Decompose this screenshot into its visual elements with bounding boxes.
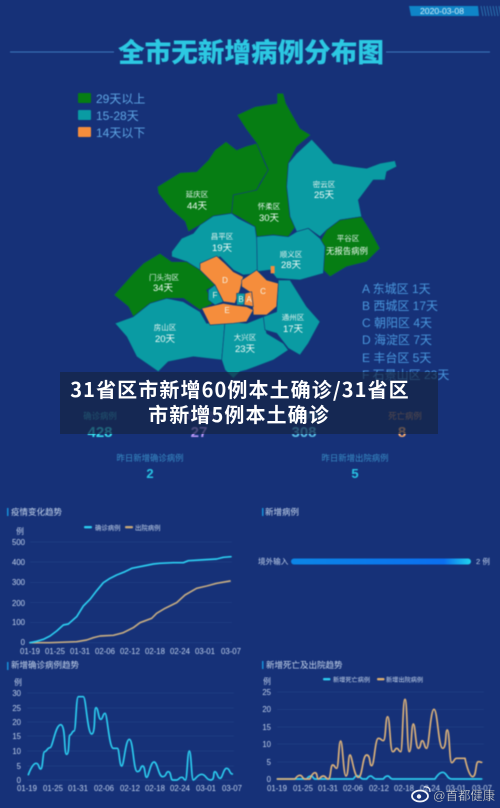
yesterday's new cases: 5 <box>351 466 359 481</box>
chart: new confirmed cases: 15 <box>12 732 22 741</box>
district: Pinggu <box>320 217 380 277</box>
panel: new cases bar: 新增病例 <box>265 507 299 517</box>
map legend: 14天以下 <box>96 126 145 140</box>
chart: new confirmed cases: 20 <box>12 718 22 727</box>
watermark <box>412 787 495 803</box>
chart: new confirmed cases: 02-12 <box>120 784 140 793</box>
district list: B 西城区 17天 <box>362 299 438 313</box>
chart: new confirmed cases: 例 <box>14 677 22 687</box>
chart: new deaths and discharges: 02-06 <box>343 784 363 793</box>
statistics row <box>83 411 422 441</box>
chart: cumulative trend: 02-18 <box>145 647 165 656</box>
chart: new confirmed cases: 新增确诊病例趋势 <box>11 660 80 670</box>
map labels: 20天 <box>155 334 176 345</box>
statistics row: 27 <box>191 424 207 441</box>
map labels: 23天 <box>235 344 256 355</box>
chart: new deaths and discharges: 02-12 <box>369 784 389 793</box>
headline overlay: 31省区市新增60例本土确诊/31省区 <box>70 374 410 403</box>
chart: cumulative trend: 500 <box>12 538 26 547</box>
chart: new deaths and discharges: 新增死亡及出院趋势 <box>266 660 343 670</box>
chart: cumulative trend: 02-06 <box>95 647 115 656</box>
line: daily deaths <box>277 772 482 779</box>
chart: cumulative trend: 100 <box>12 618 26 627</box>
district: Yanqing <box>157 142 268 232</box>
line: discharged cumulative <box>30 581 230 643</box>
map labels: 门头沟区 <box>149 272 179 282</box>
chart: cumulative trend: 03-07 <box>221 647 241 656</box>
chart: cumulative trend: 例 <box>16 526 24 536</box>
map labels: 怀柔区 <box>258 201 281 211</box>
chart: new confirmed cases: 5 <box>17 762 22 771</box>
district: Shijingshan <box>208 285 223 305</box>
chart: new confirmed cases: 01-19 <box>17 784 37 793</box>
district: Fangshan <box>115 298 225 372</box>
chart: new confirmed cases: 01-25 <box>43 784 64 793</box>
line: daily confirmed <box>28 697 232 780</box>
district: Haidian <box>200 256 243 303</box>
chart: new confirmed cases: 25 <box>12 704 22 713</box>
map labels: 延庆区 <box>186 189 209 199</box>
chart: new deaths and discharges: 5 <box>267 758 272 767</box>
chart legend: 新增出院病例 <box>386 676 423 684</box>
map labels <box>149 179 368 355</box>
district list: D 海淀区 7天 <box>362 332 432 347</box>
panel: new cases bar <box>258 507 490 566</box>
line: daily discharged <box>277 699 482 779</box>
district list: A 东城区 1天 <box>362 282 431 296</box>
icon: weibo <box>412 787 430 802</box>
map labels: 19天 <box>212 243 233 254</box>
map legend: 29天以上 <box>96 92 145 106</box>
watermark: @首都健康 <box>433 788 495 803</box>
chart: cumulative trend: 02-24 <box>170 647 191 656</box>
statistics row: 8 <box>398 424 406 441</box>
district: Tongzhou <box>263 280 320 355</box>
chart: new deaths and discharges: 10 <box>262 740 272 749</box>
chart: new confirmed cases: 02-06 <box>94 784 114 793</box>
district: Changping <box>172 213 257 275</box>
map legend <box>78 92 145 140</box>
map labels: 房山区 <box>154 322 177 332</box>
map labels: 25天 <box>314 190 335 201</box>
chart: new confirmed cases <box>7 660 242 793</box>
chart: new confirmed cases: 0 <box>17 776 22 785</box>
map labels: 44天 <box>187 201 208 212</box>
chart: cumulative trend: 02-12 <box>120 647 140 656</box>
yesterday's new cases: 2 <box>146 466 154 481</box>
title: 全市无新增病例分布图 <box>118 31 384 70</box>
map labels: 17天 <box>283 324 304 335</box>
chart: new confirmed cases: 03-07 <box>222 784 242 793</box>
statistics row: 确诊病例 <box>83 411 117 421</box>
date tag: 2020-03-08 <box>420 6 464 16</box>
chart: new confirmed cases: 02-24 <box>170 784 191 793</box>
chart: new confirmed cases: 30 <box>12 689 22 698</box>
map labels: 大兴区 <box>234 332 257 342</box>
chart: new deaths and discharges <box>262 660 492 793</box>
chart: new deaths and discharges: 03-07 <box>472 784 492 793</box>
district: Fengtai <box>202 303 253 325</box>
line: confirmed cumulative <box>30 557 231 643</box>
chart legend <box>84 523 161 532</box>
district list <box>362 282 449 382</box>
chart: cumulative trend: 01-31 <box>70 647 90 656</box>
statistics row: 疑似病例 <box>183 411 217 421</box>
map labels: C <box>260 287 266 296</box>
chart: new deaths and discharges: 01-19 <box>267 784 287 793</box>
chart: cumulative trend: 01-25 <box>45 647 66 656</box>
chart: cumulative trend <box>7 507 241 656</box>
chart: new deaths and discharges: 01-31 <box>318 784 338 793</box>
chart: new deaths and discharges: 02-24 <box>420 784 441 793</box>
chart: new confirmed cases: 10 <box>12 747 22 756</box>
chart legend: 新增死亡病例 <box>333 676 370 684</box>
chart: cumulative trend: 400 <box>12 558 26 567</box>
chart: new deaths and discharges: 25 <box>262 688 272 697</box>
district: Mentougou <box>114 253 215 317</box>
yesterday's new cases: 昨日新增出院病例 <box>322 453 388 463</box>
map labels: F <box>213 291 218 300</box>
district: Miyun <box>287 139 397 237</box>
map labels: D <box>222 276 228 285</box>
district list: F 石景山区 23天 <box>362 368 449 382</box>
yesterday's new cases: 昨日新增确诊病例 <box>116 453 184 463</box>
map labels: A <box>246 295 252 304</box>
headline overlay: 市新增5例本土确诊 <box>148 399 330 428</box>
chart: cumulative trend: 03-01 <box>195 647 215 656</box>
chart: cumulative trend: 0 <box>21 638 26 647</box>
chart: new confirmed cases: 02-18 <box>145 784 165 793</box>
chart: cumulative trend: 200 <box>12 599 26 608</box>
enclave <box>271 266 275 273</box>
district: Dongcheng <box>244 292 253 307</box>
map legend: 15-28天 <box>96 109 139 123</box>
chart: new confirmed cases: 01-31 <box>68 784 88 793</box>
chart: cumulative trend: 01-19 <box>20 647 40 656</box>
date tag <box>409 6 500 16</box>
map labels: 34天 <box>153 283 174 294</box>
map labels: 昌平区 <box>211 232 234 241</box>
statistics row: 308 <box>291 424 317 441</box>
headline overlay <box>60 372 438 434</box>
statistics row: 出院病例 <box>287 411 321 421</box>
chart legend: 出院病例 <box>135 523 161 532</box>
map labels: B <box>238 295 244 304</box>
district: Chaoyang <box>242 270 278 315</box>
chart: cumulative trend: 疫情变化趋势 <box>11 507 63 517</box>
yesterday's new cases <box>116 453 388 481</box>
district: Shunyi <box>257 228 325 280</box>
map labels: 顺义区 <box>280 250 303 259</box>
district list: E 丰台区 5天 <box>362 350 431 365</box>
panel: new cases bar: 2 例 <box>476 556 490 566</box>
chart: cumulative trend: 300 <box>12 578 26 587</box>
district: Xicheng <box>237 293 245 305</box>
map labels: 通州区 <box>282 312 305 322</box>
map labels: 平谷区 <box>337 234 360 243</box>
map labels: 密云区 <box>313 179 336 189</box>
chart: new deaths and discharges: 例 <box>263 676 271 686</box>
map labels: 28天 <box>281 260 302 271</box>
panel: new cases bar: 境外输入 <box>258 556 289 566</box>
district: Huairou <box>232 93 311 237</box>
statistics row: 死亡病例 <box>388 411 422 421</box>
chart: new deaths and discharges: 15 <box>262 723 272 732</box>
chart: new deaths and discharges: 02-18 <box>394 784 414 793</box>
statistics row: 428 <box>87 424 113 441</box>
district list: C 朝阳区 4天 <box>362 316 432 330</box>
map labels: 无报告病例 <box>326 246 368 256</box>
map labels: E <box>224 306 230 315</box>
map labels: 30天 <box>259 213 280 224</box>
chart: new deaths and discharges: 20 <box>262 705 272 714</box>
chart: new deaths and discharges: 0 <box>267 775 272 784</box>
district: Daxing <box>222 317 288 378</box>
chart: new deaths and discharges: 01-25 <box>293 784 314 793</box>
chart: new deaths and discharges: 03-01 <box>446 784 466 793</box>
chart legend: 确诊病例 <box>95 523 121 532</box>
chart legend <box>323 676 423 684</box>
chart: new confirmed cases: 03-01 <box>196 784 216 793</box>
map of Beijing districts <box>114 93 397 378</box>
